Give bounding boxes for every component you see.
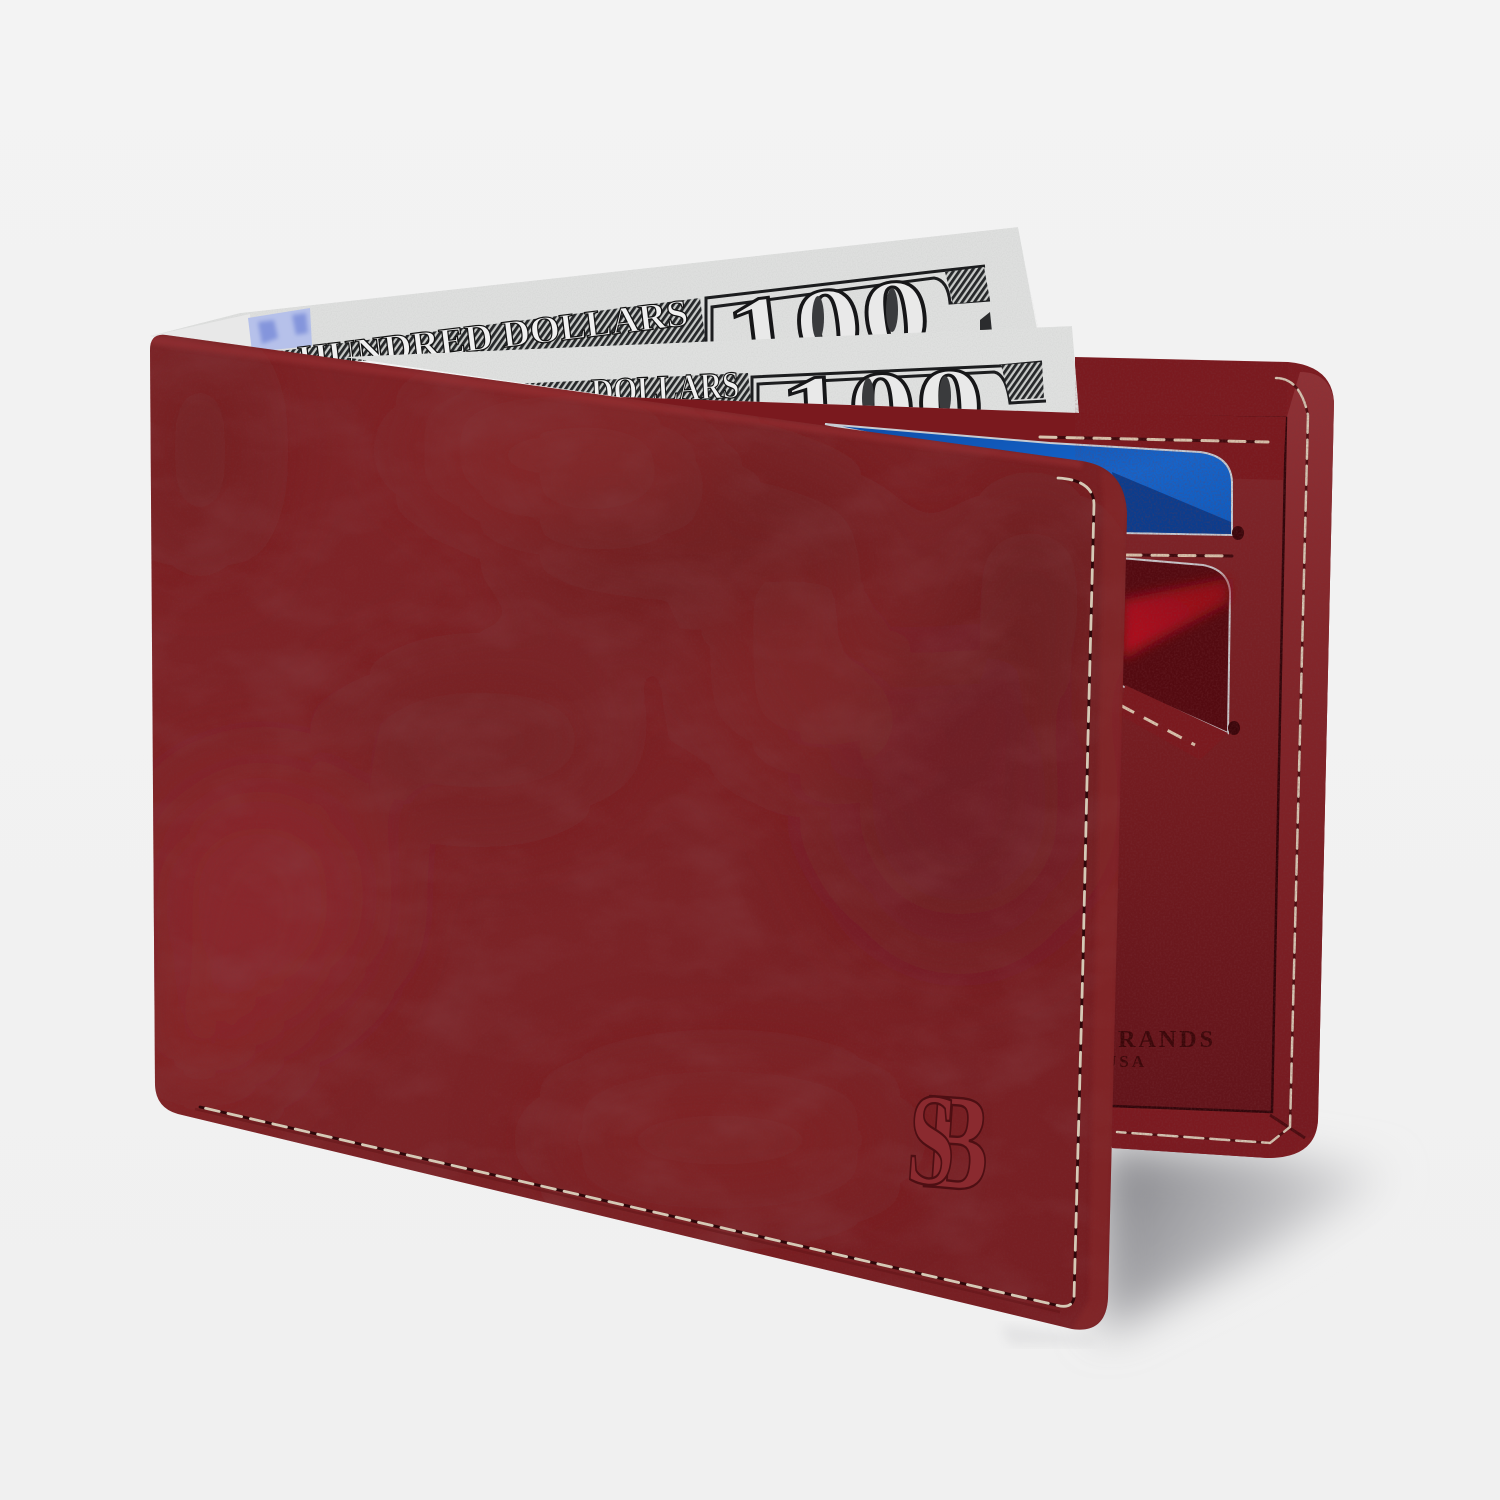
numeral 100: 100 [720,255,936,394]
front panel of the wallet [130,320,1140,1340]
stitching around the front panel [200,478,1094,1306]
embossed brand text: BRANDS [1099,1027,1213,1053]
inner lining of the back panel [1075,415,1286,1112]
right rim of the back panel [1272,372,1334,1138]
embossed SB monogram: B [920,1063,994,1220]
banknote: rear [151,227,1037,361]
lower diagonal pocket edge [1120,685,1228,760]
embossed brand text [1099,1027,1213,1071]
numeral frame [706,266,990,345]
cast shadow [1000,1145,1390,1345]
bottom rim of the back panel [1112,1110,1300,1158]
engraved dollars band [525,373,750,402]
red card [1120,558,1230,733]
embossed SB monogram: S [903,1064,961,1214]
banknote: front [343,326,1079,413]
engraved dollars band [280,298,704,361]
back panel of the wallet [1075,357,1334,1158]
numeral frame [750,360,1046,405]
card slot notches [1228,526,1244,735]
lighter rim along the right edge [1081,478,1126,1330]
leather mottling [130,320,1140,1340]
off-white fold of the note [152,314,251,346]
hundred dollars lettering: HUNDRED DOLLARS [296,292,690,381]
top strip of the back panel [1075,358,1288,416]
dollars lettering: DOLLARS [590,364,740,414]
wallet product illustration [150,227,1377,1351]
blue card [825,424,1232,535]
numeral 100: 100 [777,345,987,471]
lighter rim along the top edge [150,335,1082,468]
blue security print [248,308,312,352]
interior stitching [1040,378,1308,1143]
leather grain on the back panel [1075,358,1316,1150]
leather pocket below the notes [620,397,1286,480]
embossed brand text: USA [1104,1052,1147,1071]
